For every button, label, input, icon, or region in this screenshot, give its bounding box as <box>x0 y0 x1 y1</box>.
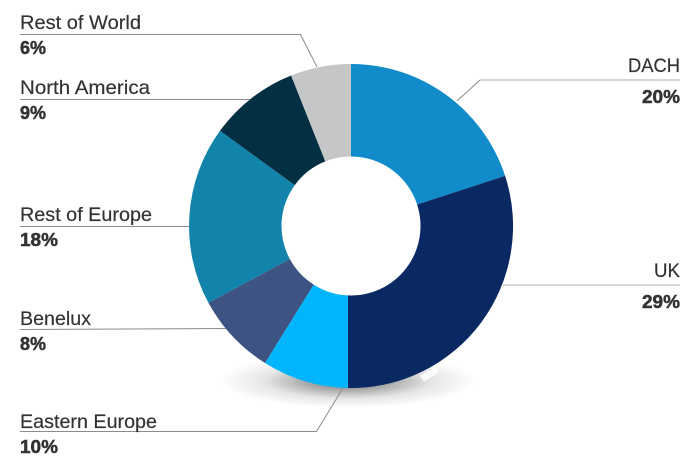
slice: UK 29% <box>348 176 513 388</box>
label: UK <box>642 260 680 312</box>
donut chart <box>189 64 513 388</box>
slice: North America 9% <box>220 76 325 185</box>
leader rule: UK <box>503 284 680 286</box>
leader line: Benelux <box>20 328 226 330</box>
leader line: Rest of World <box>20 34 317 67</box>
label: DACH: DACH <box>628 55 680 77</box>
label: DACH: 20% <box>642 86 680 107</box>
label: Eastern Europe: 10% <box>20 436 58 457</box>
label: UK: UK <box>654 260 680 282</box>
slice: Rest of World 6% <box>291 64 351 161</box>
label: Benelux <box>20 308 91 354</box>
slice: DACH 20% <box>351 64 505 204</box>
slice: Rest of Europe 18% <box>189 131 295 303</box>
label: Rest of Europe: 18% <box>20 229 58 250</box>
leader rule: DACH <box>480 79 680 81</box>
label: North America: 9% <box>20 102 46 123</box>
label: Rest of World: 6% <box>20 37 46 58</box>
shadow highlight smudge <box>420 367 439 382</box>
label: Benelux: 8% <box>20 333 46 354</box>
leader line: Rest of Europe <box>20 226 190 228</box>
leader line: Eastern Europe <box>20 388 343 432</box>
label: Benelux: Benelux <box>20 308 91 330</box>
slice: Benelux 8% <box>208 259 314 363</box>
label: North America <box>20 77 150 123</box>
label: Rest of World: Rest of World <box>20 12 141 34</box>
label: Eastern Europe: Eastern Europe <box>20 411 157 433</box>
label: DACH <box>628 55 680 107</box>
label: Rest of Europe <box>20 204 152 250</box>
label: Rest of World <box>20 12 141 58</box>
label: Eastern Europe <box>20 411 157 457</box>
label: UK: 29% <box>642 291 680 312</box>
donut shadow <box>220 354 476 408</box>
label: Rest of Europe: Rest of Europe <box>20 204 152 226</box>
slice: Eastern Europe 10% <box>265 285 348 388</box>
leader line: DACH <box>457 80 480 101</box>
label: North America: North America <box>20 77 150 99</box>
leader line: North America <box>20 98 250 100</box>
